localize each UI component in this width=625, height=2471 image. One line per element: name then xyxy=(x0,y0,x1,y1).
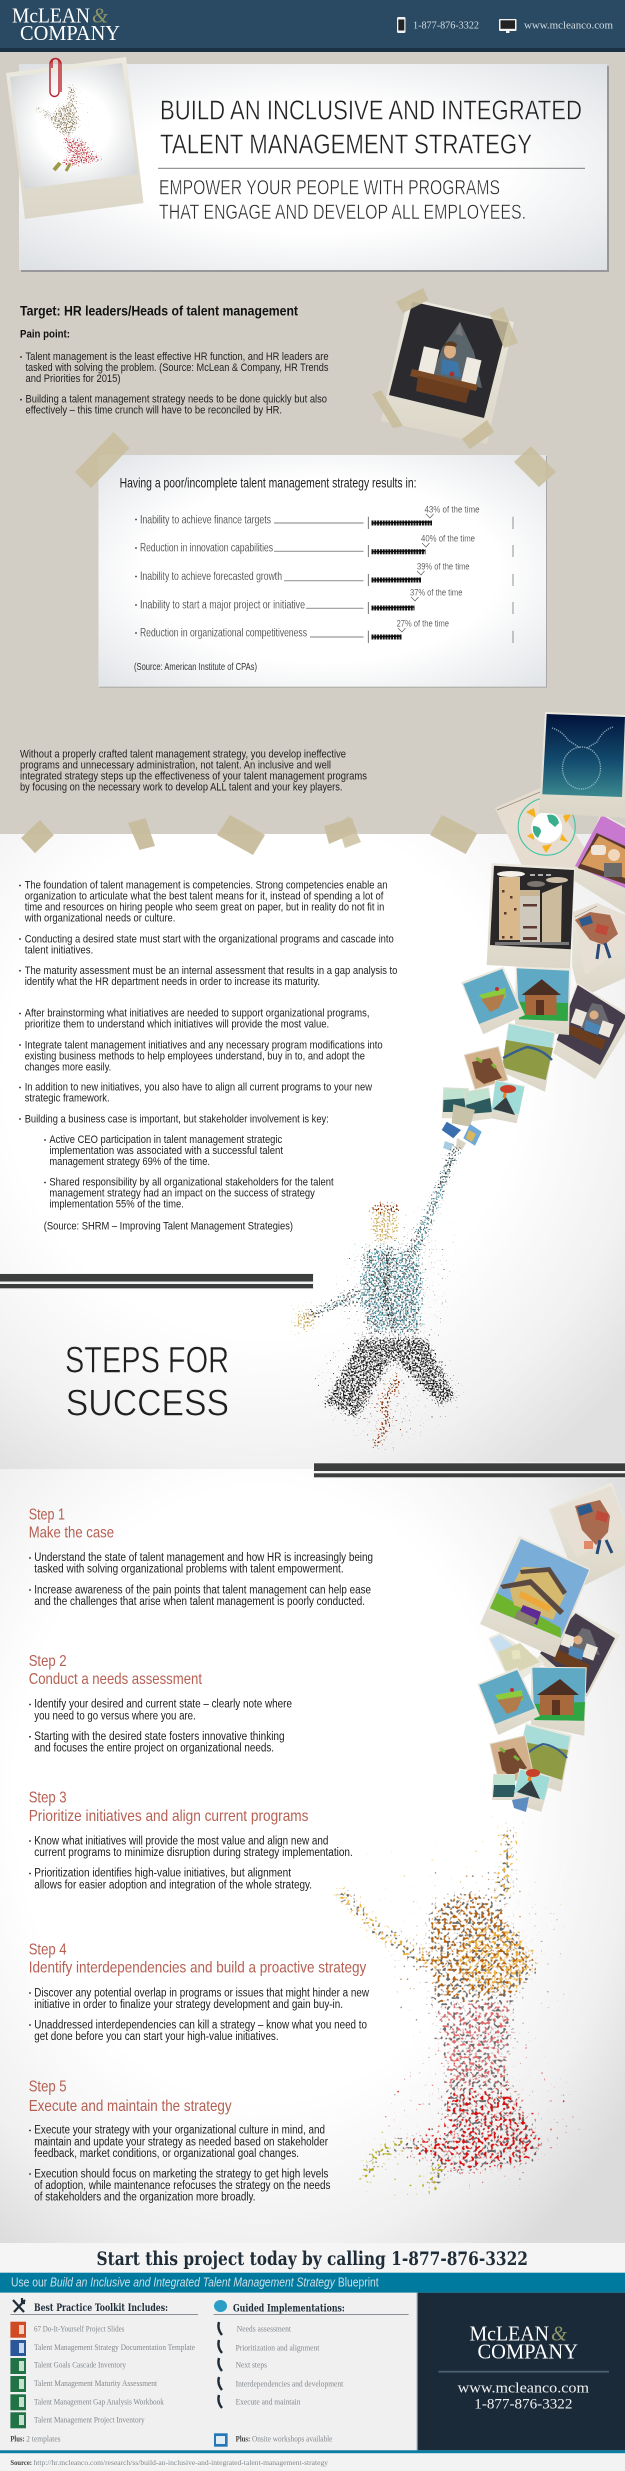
blueprint banner xyxy=(0,2273,625,2293)
banner text: Use our Build an Inclusive and Integrated Talent Management Strategy Blueprint xyxy=(11,2275,379,2290)
title: TALENT MANAGEMENT STRATEGY xyxy=(160,128,532,159)
step 4 heading: Step 4 xyxy=(29,1941,67,1958)
toolkit heading: Best Practice Toolkit Includes: xyxy=(34,2303,168,2314)
step 5 heading xyxy=(29,2079,232,2115)
footer logo: McLEAN xyxy=(470,2322,549,2346)
chart row: forecasted growth: 39% of the time xyxy=(417,562,470,572)
steps for success stripes xyxy=(0,1273,314,1289)
text: talent management details: with organizational needs or culture. xyxy=(24,913,175,925)
guided implementation list: Plus: xyxy=(236,2434,250,2444)
guided implementation list: Execute and maintain xyxy=(236,2396,301,2406)
step 5 heading: Execute and maintain the strategy xyxy=(29,2098,232,2115)
step 5 bullets: Execute your strategy with your organizational culture in mind, and xyxy=(34,2125,325,2137)
step 1 heading xyxy=(29,1506,114,1542)
photo: boxes carrier 2 xyxy=(549,1482,625,1585)
chart row: innovation: Reduction in innovation capabilities xyxy=(140,540,273,554)
step 3 heading: Prioritize initiatives and align current programs xyxy=(29,1808,308,1825)
photo: boxes carrier xyxy=(572,903,625,998)
photo: floating island xyxy=(461,967,525,1034)
tape xyxy=(514,446,556,487)
step 3 bullets: Prioritization identifies high-value initiatives, but alignment xyxy=(34,1868,292,1880)
photo: mountains 2 xyxy=(492,1774,515,1800)
icon: monitor xyxy=(499,19,516,33)
step 4 bullets: Discover any potential overlap in programs or issues that might hinder a new xyxy=(34,1987,370,1999)
step 1 bullets: and the challenges that arise when talent management is poorly conducted. xyxy=(34,1596,365,1608)
source band xyxy=(0,2453,625,2471)
text: talent management details: In addition to new initiatives, you also have to align all current programs to your new xyxy=(25,1082,372,1094)
polaroid: dancer xyxy=(6,57,144,219)
section background: details xyxy=(0,834,625,1469)
toolkit list: Talent Management Gap Analysis Workbook xyxy=(34,2396,164,2406)
call to action band xyxy=(0,2243,625,2273)
text: talent management details: Shared responsibility by all organizational stakeholders for the talent xyxy=(49,1177,334,1189)
pain point bullets: and Priorities for 2015) xyxy=(26,373,120,385)
tape xyxy=(75,432,130,488)
text: talent management details: organization to articulate what the best talent means for it, instead of spending a lot of xyxy=(25,891,384,903)
text: talent management details: talent initiatives. xyxy=(25,944,93,956)
step 3 xyxy=(29,1790,353,1891)
toolkit list: 2 templates xyxy=(26,2434,61,2444)
photo: purple video call xyxy=(573,813,625,913)
text: talent management details: The foundation of talent management is competencies. Strong competencies enable an xyxy=(25,880,387,892)
toolkit list: Plus: xyxy=(10,2434,25,2444)
footer logo xyxy=(470,2322,578,2363)
heading: steps for success xyxy=(65,1340,229,1424)
intro text block xyxy=(20,304,329,417)
step 4 bullets: initiative in order to finalize your strategy development and gain buy-in. xyxy=(34,1999,343,2011)
chart row: finance targets: 43% of the time xyxy=(424,505,480,515)
step 2 bullets: Starting with the desired state fosters innovative thinking xyxy=(34,1731,285,1743)
small fading photos xyxy=(442,1104,482,1151)
photo: rock 2 xyxy=(490,1736,533,1787)
guided implementation list: Onsite workshops available xyxy=(252,2434,333,2444)
step 4 bullets xyxy=(29,1987,370,2043)
text: talent management details: strategic framework. xyxy=(25,1093,110,1105)
footer logo: & xyxy=(551,2322,568,2346)
text: talent management details: After brainstorming what initiatives are needed to support organizational programs, xyxy=(25,1008,369,1020)
photo: cabin xyxy=(515,967,571,1035)
step 3 heading xyxy=(29,1790,308,1825)
chart row: finance targets xyxy=(135,505,513,529)
photo: landscape 2 xyxy=(514,1723,572,1792)
step 2 bullets: Identify your desired and current state – clearly note where xyxy=(34,1699,292,1711)
title xyxy=(160,94,582,159)
chart row: competitiveness: Reduction in organizational competitiveness xyxy=(140,626,307,640)
step 2 heading: Step 2 xyxy=(29,1653,67,1670)
text: talent management details: identify what the HR department needs in order to increase its maturity. xyxy=(25,976,320,988)
step 3 bullets xyxy=(29,1835,353,1891)
pain point bullets: tasked with solving the problem. (Source: McLean & Company, HR Trends xyxy=(26,362,329,374)
footer logo: COMPANY xyxy=(478,2339,578,2363)
step 1 bullets xyxy=(29,1552,373,1608)
step 5 bullets: of stakeholders and the organization more broadly. xyxy=(34,2192,255,2204)
step 4 heading xyxy=(29,1941,366,1977)
toolkit list: Talent Goals Cascade Inventory xyxy=(34,2360,127,2370)
logo: COMPANY xyxy=(20,21,120,45)
photo: grey office building xyxy=(488,1633,545,1680)
subtitle xyxy=(159,176,526,224)
icon: phone xyxy=(397,17,406,33)
step 3 heading: Step 3 xyxy=(29,1790,67,1807)
step 1 xyxy=(29,1506,373,1608)
heading: steps for success: SUCCESS xyxy=(66,1383,229,1424)
chart row: competitiveness xyxy=(135,619,513,643)
photo: globe card xyxy=(495,786,605,880)
subheading: pain point: Pain point: xyxy=(20,329,70,341)
chart row: finance targets: Inability to achieve finance targets xyxy=(140,512,271,526)
polaroid: overwhelmed manager at desk xyxy=(372,288,518,449)
text: talent management details: prioritize them to understand which initiatives will provide the most value. xyxy=(25,1019,329,1031)
step 2 bullets: and focuses the entire project on organizational needs. xyxy=(34,1743,274,1755)
step 2 bullets xyxy=(29,1699,292,1755)
guided heading: Guided Implementations: xyxy=(233,2304,345,2315)
summary paragraph: programs and unnecessary administration, not talent. An inclusive and well xyxy=(20,759,331,771)
text: talent management details: Integrate talent management initiatives and any necessary program modifications into xyxy=(25,1039,383,1051)
call to action text: Start this project today by calling 1-877-876-3322 xyxy=(96,2248,528,2270)
section background: steps xyxy=(0,1469,625,2243)
step 1 bullets: tasked with solving organizational problems with talent empowerment. xyxy=(34,1564,344,1576)
summary paragraph: integrated strategy steps up the effectiveness of your talent management programs xyxy=(20,770,367,782)
panel: footer contact xyxy=(417,2293,625,2450)
logo xyxy=(12,4,120,45)
source line: Source: xyxy=(10,2458,32,2467)
text: talent management details xyxy=(19,880,397,1233)
photo: house xyxy=(480,1536,591,1657)
step 1 heading: Make the case xyxy=(29,1525,114,1542)
step 5 bullets: Execution should focus on marketing the strategy to get high levels xyxy=(34,2168,329,2180)
text: talent management details: Building a business case is important, but stakeholder involvement is key: xyxy=(25,1113,329,1125)
step 5 bullets: feedback, market conditions, or organizational goal changes. xyxy=(34,2148,299,2160)
chart row: innovation: 40% of the time xyxy=(421,534,475,544)
chart row: innovation xyxy=(135,534,513,557)
chart row: competitiveness: 27% of the time xyxy=(397,619,449,629)
step 3 bullets: current programs to minimize disruption during strategy implementation. xyxy=(34,1847,353,1859)
guided implementation list: Interdependencies and development xyxy=(236,2378,344,2388)
photo: rock xyxy=(464,1047,508,1089)
step 5 xyxy=(29,2079,331,2204)
guided implementation list: Needs assessment xyxy=(237,2324,292,2334)
toolkit list: Talent Management Maturity Assessment xyxy=(34,2378,158,2388)
text: talent management details: management strategy 69% of the time. xyxy=(49,1156,210,1168)
chart row: forecasted growth xyxy=(135,562,513,586)
text: talent management details: (Source: SHRM – Improving Talent Management Strategies) xyxy=(44,1221,293,1233)
step 3 bullets: allows for easier adoption and integration of the whole strategy. xyxy=(34,1879,312,1891)
guided implementation list: Next steps xyxy=(236,2360,267,2370)
photo: volcano 2 xyxy=(512,1768,551,1812)
subtitle: EMPOWER YOUR PEOPLE WITH PROGRAMS xyxy=(159,176,500,199)
text: talent management details: time and resources on hiring people who seem great on paper, but in reality do not fit in xyxy=(25,902,384,914)
heading: steps for success: STEPS FOR xyxy=(65,1340,229,1381)
text: talent management details: The maturity assessment must be an internal assessment that results in a gap analysis to xyxy=(25,965,397,977)
heading: target: Target: HR leaders/Heads of talent management xyxy=(20,304,298,319)
toolkit list: 67 Do-It-Yourself Project Slides xyxy=(34,2324,124,2334)
photo: mountains left xyxy=(442,1087,469,1118)
source line: http://hr.mcleanco.com/research/ss/build-an-inclusive-and-integrated-talent-management-strategy xyxy=(34,2458,328,2467)
toolkit list: Talent Management Project Inventory xyxy=(34,2414,145,2424)
photo: dark desk manager xyxy=(553,983,625,1079)
text: talent management details: existing business methods to help employees understand, buy in to, and adopt the xyxy=(25,1050,365,1062)
footer contact details: www.mcleanco.com xyxy=(458,2380,589,2396)
stripe lower right xyxy=(313,1462,625,1478)
footer contact details: 1-877-876-3322 xyxy=(474,2396,572,2412)
pain point bullets: Building a talent management strategy needs to be done quickly but also xyxy=(26,394,327,406)
chart source: (Source: American Institute of CPAs) xyxy=(134,661,257,673)
toolkit list xyxy=(10,2322,195,2444)
chart row: major project xyxy=(135,587,513,614)
step 1 heading: Step 1 xyxy=(29,1506,65,1523)
toolkit list: Talent Management Strategy Documentation Template xyxy=(34,2342,195,2352)
step 5 heading: Step 5 xyxy=(29,2079,67,2096)
pain point bullets: effectively – this time crunch will have to be reconciled by HR. xyxy=(26,405,282,417)
particle figure: leaping man xyxy=(285,1142,466,1457)
logo: & xyxy=(92,4,109,28)
step 5 bullets xyxy=(29,2125,331,2204)
header website: www.mcleanco.com xyxy=(524,21,613,32)
guided implementation list xyxy=(214,2322,344,2447)
step 2 heading: Conduct a needs assessment xyxy=(29,1671,202,1688)
chart row: major project: 37% of the time xyxy=(410,587,462,597)
footer contact details xyxy=(458,2380,589,2412)
pain point bullets xyxy=(20,351,329,417)
photo: dark desk manager 2 xyxy=(536,1611,620,1697)
photo: floating island 2 xyxy=(477,1667,540,1735)
summary paragraph: by focusing on the necessary work to develop ALL talent and your key players. xyxy=(20,781,342,793)
step 2 xyxy=(29,1653,292,1755)
photo: landscape xyxy=(502,1023,556,1092)
text: talent management details: management strategy had an impact on the success of strategy xyxy=(49,1188,315,1200)
chart heading: Having a poor/incomplete talent management strategy results in: xyxy=(120,475,416,491)
step 4 heading: Identify interdependencies and build a proactive strategy xyxy=(29,1960,366,1977)
logo: McLEAN xyxy=(12,4,90,28)
icon: tools xyxy=(13,2298,25,2312)
step 2 heading xyxy=(29,1653,202,1688)
photo: taurus constellation xyxy=(539,712,625,818)
photo: skyscrapers xyxy=(487,863,575,969)
step 4 bullets: get done before you can start your high-value initiatives. xyxy=(34,2031,279,2043)
step 1 bullets: Understand the state of talent management and how HR is increasingly being xyxy=(34,1552,373,1564)
panel: hero title xyxy=(19,64,609,272)
summary paragraph: Without a properly crafted talent management strategy, you develop ineffective xyxy=(20,748,346,760)
icon: guided implementation circle xyxy=(214,2300,227,2312)
particle figure: woman with raised arms xyxy=(330,1805,580,2203)
header bar xyxy=(0,0,625,52)
step 5 bullets: maintain and update your strategy as needed based on stakeholder xyxy=(34,2136,328,2148)
step 2 bullets: you need to go versus where you are. xyxy=(34,1710,196,1722)
step 5 bullets: of adoption, while maintenance refocuses the strategy on the needs xyxy=(34,2180,331,2192)
photo: mountains right xyxy=(463,1087,493,1122)
step 4 xyxy=(29,1941,370,2043)
text: talent management details: implementation 55% of the time. xyxy=(49,1199,184,1211)
panel: chart results xyxy=(75,432,556,688)
photo: volcano xyxy=(491,1080,525,1123)
panel: toolkit footer xyxy=(0,2293,418,2450)
footer rule xyxy=(0,2450,625,2453)
chart row: major project: Inability to start a major project or initiative xyxy=(140,597,305,611)
pain point bullets: Talent management is the least effective HR function, and HR leaders are xyxy=(26,351,328,363)
icon: paperclip xyxy=(50,58,61,96)
text: talent management details: implementation was associated with a successful talent xyxy=(49,1145,283,1157)
text: talent management details: Active CEO participation in talent management strategic xyxy=(49,1134,283,1146)
summary paragraph xyxy=(20,748,367,793)
step 3 bullets: Know what initiatives will provide the most value and align new and xyxy=(34,1835,328,1847)
chart row: forecasted growth: Inability to achieve forecasted growth xyxy=(140,569,282,583)
text: talent management details: Conducting a desired state must start with the organizational programs and cascade into xyxy=(25,933,394,945)
photo: cabin 2 xyxy=(531,1667,587,1736)
text: talent management details: changes more easily. xyxy=(25,1061,111,1073)
guided implementation list: Prioritization and alignment xyxy=(236,2342,320,2352)
step 1 bullets: Increase awareness of the pain points that talent management can help ease xyxy=(34,1584,371,1596)
header phone number: 1-877-876-3322 xyxy=(413,21,479,32)
step 4 bullets: Unaddressed interdependencies can kill a strategy – know what you need to xyxy=(34,2019,367,2031)
tape row xyxy=(21,815,477,855)
